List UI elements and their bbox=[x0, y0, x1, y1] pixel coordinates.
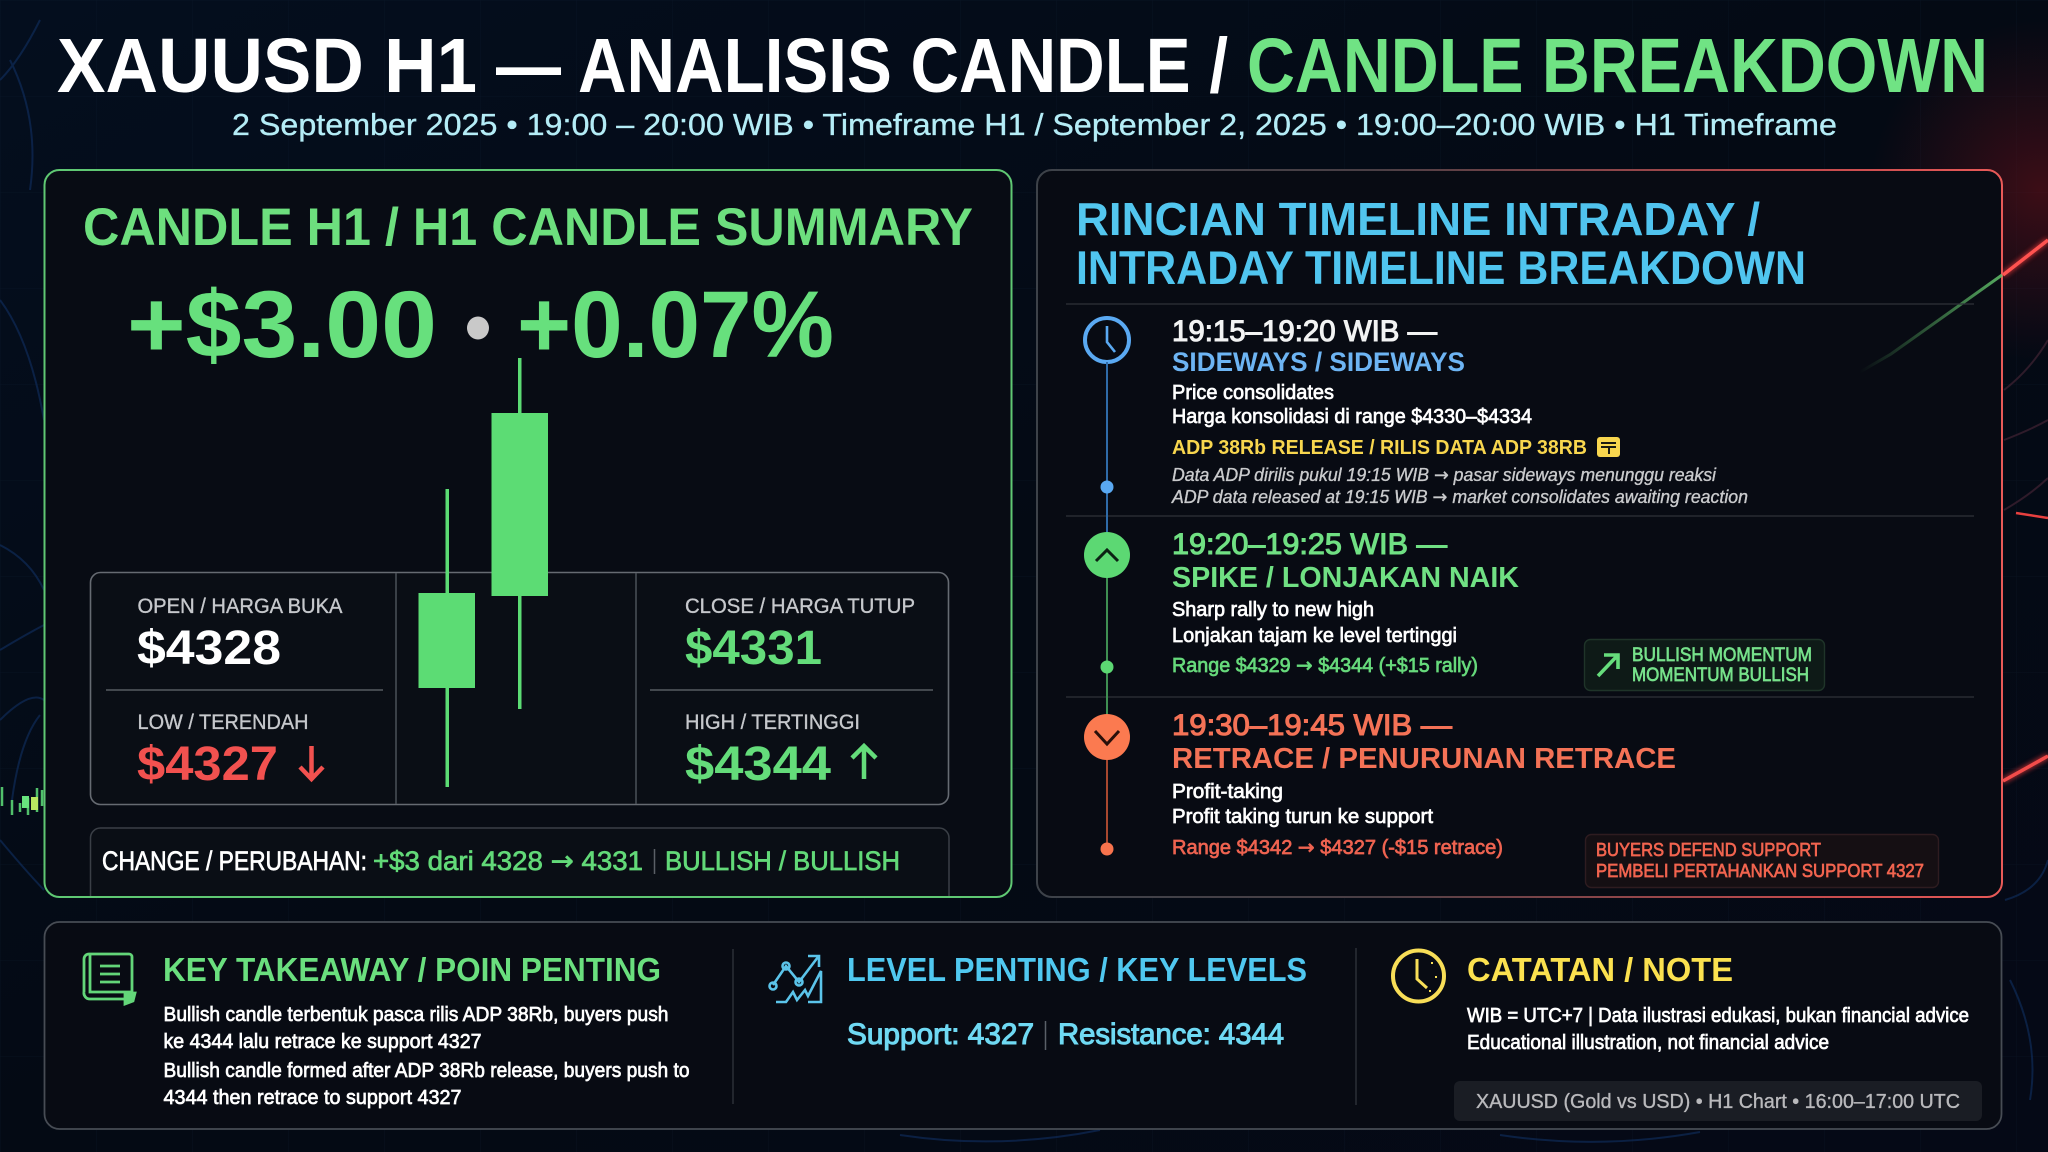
badge: bullish momentum: MOMENTUM BULLISH bbox=[1632, 665, 1809, 686]
section: key takeaway bbox=[84, 951, 689, 1109]
timeline entry: sideways: 19:15–19:20 WIB — bbox=[1172, 315, 1437, 348]
change strip: CHANGE / PERUBAHAN: bbox=[102, 846, 367, 876]
timeline entry: retrace: Profit taking turun ke support bbox=[1172, 805, 1433, 828]
section: key levels bbox=[770, 951, 1307, 1051]
section: key takeaway: ke 4344 lalu retrace ke support 4327 bbox=[164, 1030, 482, 1053]
title bbox=[57, 23, 1988, 109]
icon: chevron down bbox=[1084, 714, 1130, 760]
timeline entry: retrace bbox=[1084, 709, 1938, 888]
heading: timeline bbox=[1076, 193, 1806, 294]
timeline entry: spike: SPIKE / LONJAKAN NAIK bbox=[1172, 562, 1519, 594]
icon: news card bbox=[1597, 437, 1620, 457]
section: key takeaway: 4344 then retrace to support 4327 bbox=[164, 1086, 462, 1109]
timeline entry: retrace: Profit-taking bbox=[1172, 780, 1283, 803]
section: key takeaway: Bullish candle formed after ADP 38Rb release, buyers push to bbox=[164, 1059, 690, 1082]
section: key takeaway: Bullish candle terbentuk pasca rilis ADP 38Rb, buyers push bbox=[164, 1003, 668, 1026]
change strip: +$3 dari 4328 → 4331 bbox=[373, 846, 643, 877]
footer pill: XAUUSD (Gold vs USD) • H1 Chart • 16:00–17:00 UTC bbox=[1476, 1090, 1960, 1113]
timeline entry: spike bbox=[1084, 528, 1824, 716]
small market chart at left edge bbox=[2, 787, 42, 815]
timeline entry: sideways: SIDEWAYS / SIDEWAYS bbox=[1172, 347, 1465, 377]
panel: bottom takeaways bbox=[44, 922, 2002, 1129]
timeline entry: sideways: ADP 38Rb RELEASE / RILIS DATA ADP 38RB bbox=[1172, 436, 1587, 459]
title: ANALISIS CANDLE / bbox=[578, 23, 1228, 109]
section: note: WIB = UTC+7 | Data ilustrasi edukasi, bukan financial advice bbox=[1467, 1004, 1969, 1027]
timeline entry: retrace: 19:30–19:45 WIB — bbox=[1172, 709, 1452, 742]
heading: candle summary: CANDLE H1 / H1 CANDLE SUMMARY bbox=[83, 198, 973, 257]
stat: low: $4327 bbox=[137, 738, 278, 791]
icon: chart arrow bbox=[770, 956, 821, 1002]
OHLC table frame bbox=[90, 572, 948, 804]
stat: close bbox=[685, 595, 915, 675]
icon: book bbox=[84, 954, 135, 1004]
stat: low: LOW / TERENDAH bbox=[138, 711, 308, 734]
decorative streak bbox=[1860, 275, 2002, 372]
stat: close: CLOSE / HARGA TUTUP bbox=[685, 595, 915, 618]
stat: low bbox=[137, 711, 323, 791]
icon: clock bbox=[1393, 950, 1444, 1002]
section: key levels: LEVEL PENTING / KEY LEVELS bbox=[847, 951, 1307, 988]
timeline entry: retrace: Range $4342 → $4327 (-$15 retrace) bbox=[1172, 835, 1503, 859]
badge: buyers defend support: BUYERS DEFEND SUPPORT bbox=[1596, 839, 1821, 860]
section: key takeaway: KEY TAKEAWAY / POIN PENTING bbox=[163, 951, 661, 988]
heading: timeline: INTRADAY TIMELINE BREAKDOWN bbox=[1076, 241, 1806, 294]
timeline entry: sideways bbox=[1085, 315, 1748, 578]
timeline entry: spike: Lonjakan tajam ke level tertinggi bbox=[1172, 624, 1457, 647]
badge: bullish momentum bbox=[1584, 640, 1824, 690]
icon: arrow up bbox=[852, 746, 876, 779]
change strip bbox=[90, 828, 949, 896]
timeline entry: sideways: Harga konsolidasi di range $4330–$4334 bbox=[1172, 405, 1532, 428]
badge: buyers defend support: PEMBELI PERTAHANKAN SUPPORT 4327 bbox=[1596, 860, 1924, 881]
icon: clock bbox=[1085, 318, 1129, 578]
candlestick chart bbox=[418, 358, 548, 787]
badge: bullish momentum: BULLISH MOMENTUM bbox=[1632, 645, 1812, 666]
stat: open bbox=[137, 595, 342, 675]
panel: intraday timeline bbox=[1037, 170, 2002, 897]
change strip: BULLISH / BULLISH bbox=[665, 846, 900, 876]
section: key levels: Support: 4327 bbox=[847, 1018, 1034, 1051]
section: note bbox=[1393, 950, 1982, 1121]
title: XAUUSD H1 bbox=[57, 23, 477, 109]
stat: high bbox=[685, 711, 876, 791]
stat: open: OPEN / HARGA BUKA bbox=[138, 595, 342, 618]
heading: timeline: RINCIAN TIMELINE INTRADAY / bbox=[1076, 193, 1760, 245]
title: — bbox=[496, 23, 561, 109]
badge: buyers defend support bbox=[1586, 834, 1938, 888]
big change figures: +0.07% bbox=[517, 272, 834, 378]
stat: open: $4328 bbox=[137, 622, 281, 675]
section: key levels: Resistance: 4344 bbox=[1058, 1018, 1284, 1051]
stat: high: HIGH / TERTINGGI bbox=[685, 711, 860, 734]
footer pill bbox=[1454, 1081, 1982, 1121]
icon: arrow down bbox=[300, 746, 323, 779]
timeline entry: sideways: Price consolidates bbox=[1172, 381, 1334, 404]
timeline entry: sideways: ADP data released at 19:15 WIB → market consolidates awaiting reaction bbox=[1171, 487, 1748, 508]
icon: chevron up bbox=[1084, 532, 1130, 578]
stat: close: $4331 bbox=[685, 622, 822, 675]
timeline entry: spike: 19:20–19:25 WIB — bbox=[1172, 528, 1447, 561]
decorative streak: red light lines at right edge bbox=[2003, 240, 2048, 781]
big change figures: +$3.00 bbox=[127, 272, 437, 378]
stat: high: $4344 bbox=[685, 738, 831, 791]
timeline entry: spike: Range $4329 → $4344 (+$15 rally) bbox=[1172, 653, 1478, 677]
timeline entry: sideways: Data ADP dirilis pukul 19:15 WIB → pasar sideways menunggu reaksi bbox=[1172, 465, 1717, 486]
section: note: CATATAN / NOTE bbox=[1467, 951, 1733, 988]
timeline entry: spike: Sharp rally to new high bbox=[1172, 598, 1374, 621]
timeline entry: retrace: RETRACE / PENURUNAN RETRACE bbox=[1172, 743, 1676, 775]
big change figures bbox=[127, 272, 834, 378]
panel: H1 candle summary bbox=[44, 170, 1012, 897]
section: note: Educational illustration, not financial advice bbox=[1467, 1031, 1829, 1054]
subtitle: 2 September 2025 • 19:00 – 20:00 WIB • Timeframe H1 / September 2, 2025 • 19:00–20:00 WIB • H1 Timeframe bbox=[232, 107, 1837, 142]
